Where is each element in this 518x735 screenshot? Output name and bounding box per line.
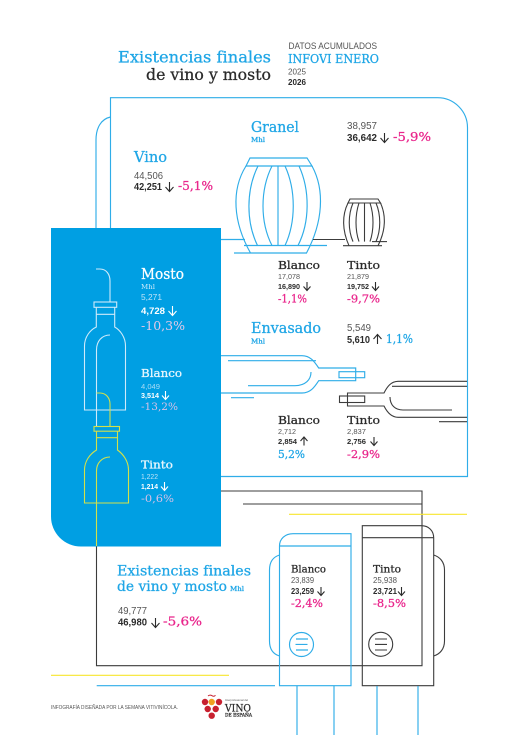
mosto blanco figures: -13,2% [141, 401, 178, 413]
box blanco figures: Blanco [291, 564, 326, 576]
total heading: de vino y mosto [117, 579, 227, 595]
box tinto figures: -8,5% [373, 596, 406, 610]
logo: Vino de España: Interprofesional del [225, 698, 248, 702]
panel: bottom frame lines [96, 491, 467, 666]
mosto tinto figures: Tinto [141, 458, 173, 472]
icon: blue lying bottle [221, 356, 365, 398]
envasado tinto figures: -2,9% [347, 448, 380, 461]
granel heading and figures: 38,957 [347, 121, 377, 132]
envasado tinto figures: 2,756 [347, 437, 366, 446]
envasado blanco figures: 5,2% [278, 448, 305, 461]
vino heading and figures: -5,1% [178, 179, 213, 193]
vino heading and figures: 44,506 [134, 171, 163, 182]
granel blanco figures: Blanco [278, 258, 320, 272]
granel blanco figures: -1,1% [278, 293, 307, 306]
mosto figures: -10,3% [141, 319, 185, 333]
subtitle: data period [288, 41, 379, 87]
envasado blanco figures: Blanco [278, 413, 320, 427]
title: Existencias finales [118, 48, 271, 66]
panel: mosto [51, 228, 221, 546]
mosto tinto figures: 1,222 [141, 474, 158, 481]
granel heading and figures: -5,9% [393, 129, 431, 144]
box tinto figures [373, 564, 406, 610]
mosto figures [141, 267, 185, 333]
title: de vino y mosto [146, 65, 271, 84]
granel tinto figures: 19,752 [347, 282, 369, 291]
icon: yellow bottle [84, 393, 128, 546]
mosto tinto figures: -0,6% [141, 493, 174, 505]
mosto blanco figures: 3,514 [141, 391, 160, 400]
granel tinto figures: -9,7% [347, 293, 380, 306]
logo: Vino de España: DE ESPAÑA [225, 713, 253, 718]
envasado blanco figures: 2,712 [278, 427, 296, 436]
mosto tinto figures [141, 458, 174, 505]
envasado blanco figures: 2,854 [278, 437, 298, 446]
subtitle: data period: INFOVI ENERO [288, 52, 379, 66]
box blanco figures: 23,259 [291, 587, 315, 596]
envasado tinto figures: Tinto [347, 413, 380, 427]
granel blanco figures: 16,890 [278, 282, 300, 291]
mosto blanco figures: Blanco [141, 366, 182, 380]
box tinto figures: Tinto [373, 564, 401, 576]
envasado tinto figures [347, 413, 380, 461]
total figures: 46,980 [118, 618, 147, 629]
envasado heading and figures: 5,610 [347, 335, 370, 346]
vino heading and figures: Vino [133, 150, 167, 166]
total figures: -5,6% [163, 614, 202, 629]
box blanco figures: 23,839 [291, 576, 315, 585]
box blanco figures: -2,4% [291, 597, 323, 610]
logo: Vino de España: VINO [224, 702, 251, 714]
mosto figures: Mhl [141, 284, 155, 291]
panel: vino frame [96, 98, 468, 476]
vino heading and figures: 42,251 [134, 182, 162, 193]
granel heading and figures: Mhl [251, 137, 265, 144]
footer lines [51, 675, 275, 686]
envasado blanco figures [278, 413, 320, 461]
subtitle: data period: DATOS ACUMULADOS [288, 41, 377, 51]
envasado heading and figures [251, 321, 413, 346]
subtitle: data period: 2026 [288, 78, 307, 87]
vino heading and figures [133, 150, 213, 193]
icon: blanco wine box [270, 534, 351, 735]
granel blanco figures [278, 258, 320, 306]
logo: Vino de España [202, 695, 253, 719]
box tinto figures: 23,721 [373, 587, 398, 596]
icon: tinto wine box [362, 526, 444, 735]
granel tinto figures: 21,879 [347, 272, 369, 281]
total heading [117, 564, 251, 595]
box blanco figures [291, 564, 326, 610]
granel heading and figures: 36,642 [347, 133, 377, 144]
mosto blanco figures [141, 366, 182, 413]
icon: dark lying bottle [340, 381, 467, 422]
envasado heading and figures: Mhl [251, 339, 265, 346]
envasado tinto figures: 2,837 [347, 427, 366, 436]
mosto blanco figures: 4,049 [141, 384, 160, 391]
mosto figures: 4,728 [141, 306, 165, 316]
mosto figures: 5,271 [141, 293, 163, 302]
subtitle: data period: 2025 [288, 68, 307, 76]
title [118, 48, 271, 84]
granel heading and figures [251, 120, 431, 144]
mosto figures: Mosto [141, 267, 184, 283]
envasado heading and figures: 5,549 [347, 323, 371, 334]
granel heading and figures: Granel [251, 120, 299, 136]
envasado heading and figures: Envasado [251, 321, 321, 337]
envasado heading and figures: 1,1% [386, 331, 413, 346]
total heading: Mhl [230, 586, 244, 593]
icon: small dark barrel [313, 199, 387, 246]
icon: white bottle [84, 269, 126, 426]
granel tinto figures [347, 258, 380, 306]
total heading: Existencias finales [117, 564, 251, 580]
box tinto figures: 25,938 [373, 576, 398, 585]
mosto tinto figures: 1,214 [141, 482, 159, 491]
icon: large blue barrel [220, 158, 327, 253]
granel blanco figures: 17,078 [278, 272, 300, 281]
total figures: 49,777 [118, 606, 147, 617]
footer credit: INFOGRAFÍA DISEÑADA POR LA SEMANA VITIVINÍCOLA. [51, 704, 178, 711]
granel tinto figures: Tinto [347, 258, 380, 272]
total figures [118, 606, 202, 629]
